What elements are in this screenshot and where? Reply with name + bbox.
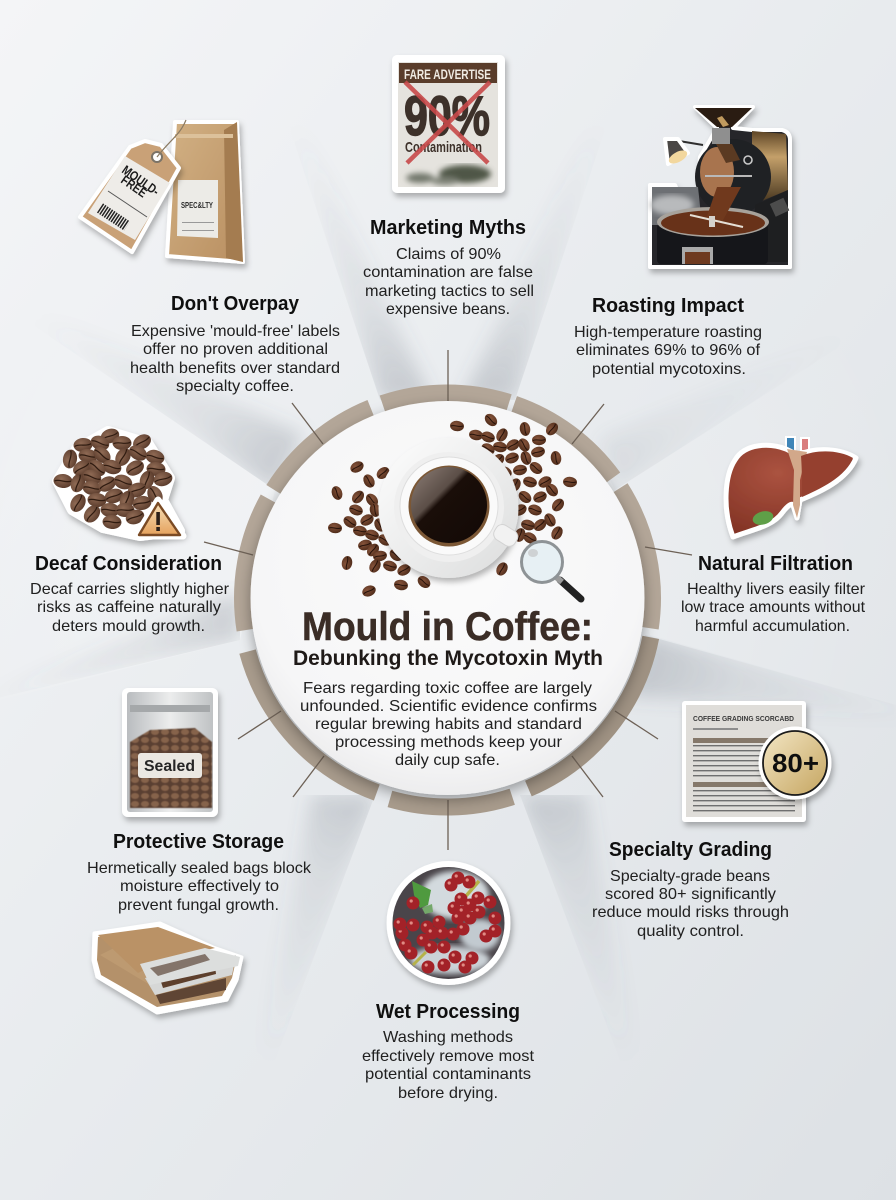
intro text: regular brewing habits and standard bbox=[315, 716, 582, 733]
body text: Hermetically sealed bags block bbox=[87, 860, 312, 877]
body text: risks as caffeine naturally bbox=[37, 599, 221, 616]
heading: Wet Processing bbox=[376, 1000, 520, 1023]
icon: false advertisement poster: 90% bbox=[404, 84, 490, 147]
intro text: unfounded. Scientific evidence confirms bbox=[300, 698, 597, 715]
heading: Specialty Grading bbox=[609, 838, 772, 861]
panel: wet processing bbox=[362, 861, 535, 1102]
intro text: daily cup safe. bbox=[395, 752, 500, 769]
central hub bbox=[250, 401, 644, 795]
body text: contamination are false bbox=[363, 264, 533, 281]
icon: grading scorecard bbox=[682, 701, 832, 822]
body text: scored 80+ significantly bbox=[605, 886, 776, 903]
intro text bbox=[300, 680, 597, 769]
body text bbox=[681, 581, 866, 635]
intro text: processing methods keep your bbox=[335, 734, 563, 751]
body text: potential mycotoxins. bbox=[592, 361, 746, 378]
kraft bag: SPEC&LTY bbox=[181, 200, 213, 210]
icon: grading scorecard: COFFEE GRADING SCORCABD bbox=[693, 714, 795, 723]
icon: warning triangle bbox=[136, 500, 183, 536]
icon: bowl of washed coffee cherries bbox=[386, 861, 510, 985]
kraft bag bbox=[167, 122, 243, 262]
panel: specialty grading bbox=[592, 701, 832, 940]
body text: eliminates 69% to 96% of bbox=[576, 342, 761, 359]
icon: sealed bag: Sealed bbox=[144, 758, 195, 775]
body text: prevent fungal growth. bbox=[118, 897, 279, 914]
body text: Expensive 'mould-free' labels bbox=[131, 323, 340, 340]
heading: Roasting Impact bbox=[592, 294, 744, 317]
heading: Natural Filtration bbox=[698, 552, 853, 575]
body text: potential contaminants bbox=[365, 1066, 531, 1083]
title: Mould in Coffee: bbox=[302, 605, 593, 649]
body text: specialty coffee. bbox=[176, 378, 294, 395]
body text: expensive beans. bbox=[386, 301, 510, 318]
badge: 80+: 80+ bbox=[772, 748, 819, 778]
body text: moisture effectively to bbox=[120, 878, 279, 895]
intro text: Fears regarding toxic coffee are largely bbox=[303, 680, 592, 697]
body text: quality control. bbox=[637, 923, 744, 940]
background wedges and shadows bbox=[60, 92, 856, 1004]
body text: Washing methods bbox=[383, 1029, 513, 1046]
body text: deters mould growth. bbox=[52, 618, 205, 635]
heading: Protective Storage bbox=[113, 830, 284, 853]
icon: liver bbox=[726, 437, 856, 537]
body text bbox=[87, 860, 312, 914]
subtitle: Debunking the Mycotoxin Myth bbox=[293, 647, 603, 670]
body text bbox=[362, 1029, 535, 1102]
body text: Decaf carries slightly higher bbox=[30, 581, 230, 598]
panel: marketing myths bbox=[363, 55, 534, 318]
icon: kraft coffee bag with mould-free tag bbox=[80, 120, 243, 262]
body text: effectively remove most bbox=[362, 1048, 535, 1065]
panel: natural filtration bbox=[681, 437, 866, 635]
coffee cup on saucer bbox=[378, 438, 520, 578]
body text bbox=[130, 323, 340, 395]
coffee beans: right cluster bbox=[450, 411, 577, 546]
body text bbox=[363, 246, 534, 318]
icon: false advertisement poster bbox=[392, 55, 505, 193]
price tag: MOULD- bbox=[119, 162, 162, 199]
price tag bbox=[80, 120, 186, 252]
icon: sealed bag bbox=[122, 688, 218, 817]
body text bbox=[574, 324, 762, 378]
segmented outer ring bbox=[164, 315, 731, 881]
body text: offer no proven additional bbox=[143, 341, 328, 358]
icon: false advertisement poster: FARE ADVERTISE bbox=[404, 66, 491, 82]
body text: Claims of 90% bbox=[396, 246, 501, 263]
icon: bean pile with warning bbox=[53, 426, 183, 536]
body text: marketing tactics to sell bbox=[365, 283, 534, 300]
heading: Marketing Myths bbox=[370, 216, 526, 239]
body text: reduce mould risks through bbox=[592, 904, 789, 921]
connector lines bbox=[204, 350, 692, 850]
body text bbox=[30, 581, 230, 635]
body text: Specialty-grade beans bbox=[610, 868, 770, 885]
heading: Don't Overpay bbox=[171, 292, 300, 315]
body text bbox=[592, 868, 789, 940]
panel: roasting impact bbox=[574, 107, 790, 378]
panel: decaf consideration bbox=[30, 426, 230, 635]
panel: protective storage bbox=[87, 688, 312, 1013]
price tag: FREE bbox=[118, 172, 150, 201]
icon: stacked pouches bbox=[93, 923, 242, 1013]
body text: low trace amounts without bbox=[681, 599, 866, 616]
body text: High-temperature roasting bbox=[574, 324, 762, 341]
badge: 80+ bbox=[758, 726, 832, 800]
coffee beans: left cluster bbox=[328, 459, 510, 599]
heading: Decaf Consideration bbox=[35, 552, 222, 575]
icon: coffee roaster bbox=[650, 107, 790, 267]
body text: before drying. bbox=[398, 1085, 498, 1102]
body text: Healthy livers easily filter bbox=[687, 581, 866, 598]
icon: false advertisement poster: Contamination bbox=[405, 139, 482, 156]
body text: health benefits over standard bbox=[130, 360, 340, 377]
body text: harmful accumulation. bbox=[695, 618, 850, 635]
magnifying glass bbox=[522, 542, 581, 599]
panel: don't overpay bbox=[80, 120, 340, 395]
